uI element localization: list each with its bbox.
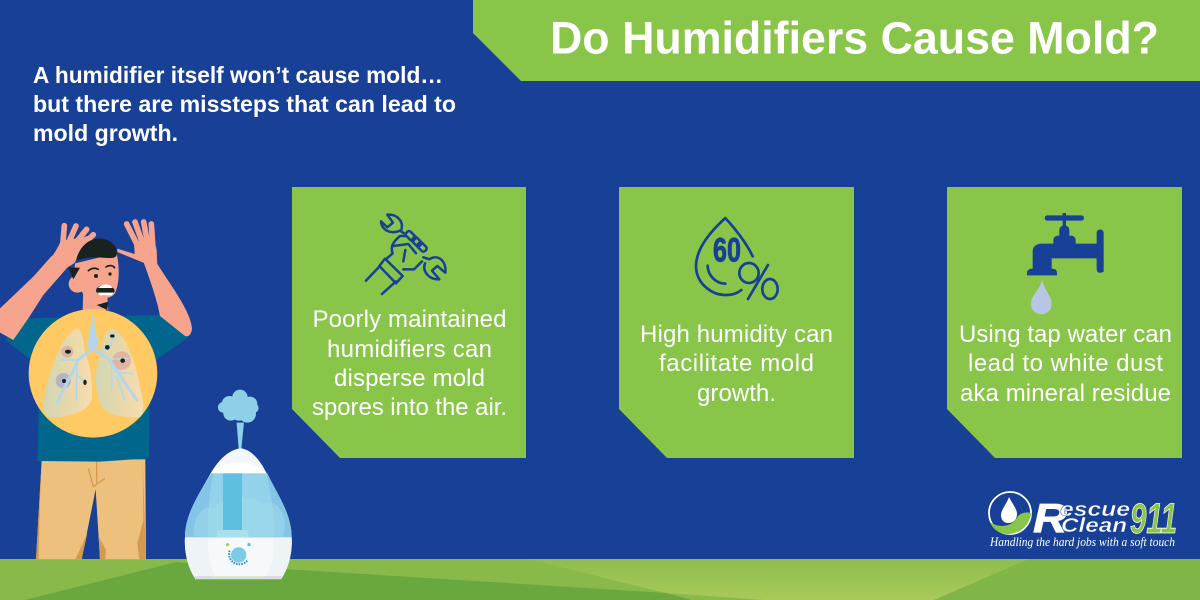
body text: lead to white dust — [968, 350, 1163, 377]
body text: Poorly maintained — [312, 306, 506, 333]
body text: humidifiers can — [327, 336, 492, 363]
water tank — [185, 473, 292, 537]
logo emblem — [989, 492, 1031, 534]
body text: facilitate mold — [659, 350, 814, 377]
intro text: but there are missteps that can lead to — [33, 91, 456, 117]
logo — [989, 492, 1177, 549]
head — [68, 239, 119, 299]
ground — [0, 559, 1200, 600]
body text: spores into the air. — [312, 394, 507, 421]
title banner — [473, 0, 1200, 81]
body text: aka mineral residue — [960, 380, 1171, 407]
logo words: Clean — [1061, 515, 1127, 537]
arms and hands — [0, 222, 192, 340]
body text — [312, 306, 507, 421]
lungs — [44, 328, 92, 417]
panel: tap water — [947, 187, 1182, 458]
body text: disperse mold — [334, 365, 485, 392]
body text — [640, 321, 833, 407]
logo R: R — [1033, 495, 1067, 541]
logo 911: 911 — [1130, 495, 1177, 543]
body — [185, 448, 292, 578]
bronchi — [87, 313, 99, 347]
body text: High humidity can — [640, 321, 833, 348]
panel: maintenance — [292, 187, 526, 458]
icon: hand holding wrench — [366, 215, 445, 294]
illustration: worried man with lungs — [0, 222, 192, 559]
icon: faucet with drop — [1027, 213, 1104, 314]
icon: 60 percent drop — [696, 218, 778, 299]
trousers — [36, 459, 146, 559]
intro text: mold growth. — [33, 120, 178, 146]
steam — [218, 390, 259, 449]
lungs circle — [29, 309, 157, 438]
body text — [959, 321, 1172, 407]
body text: Using tap water can — [959, 321, 1172, 348]
intro text — [33, 62, 456, 146]
tagline: Handling the hard jobs with a soft touch — [989, 535, 1175, 549]
infection spots — [61, 346, 73, 358]
panel: humidity — [619, 187, 854, 458]
controls — [226, 543, 229, 546]
body text: growth. — [697, 380, 776, 407]
logo words: escue — [1060, 499, 1130, 521]
title: Do Humidifiers Cause Mold? — [550, 12, 1159, 64]
base — [185, 538, 292, 578]
60 label: 60 — [713, 232, 741, 270]
shirt — [5, 315, 189, 462]
logo words — [1060, 499, 1130, 537]
neck — [83, 287, 108, 310]
illustration: humidifier — [185, 390, 292, 579]
intro text: A humidifier itself won’t cause mold… — [33, 62, 443, 88]
